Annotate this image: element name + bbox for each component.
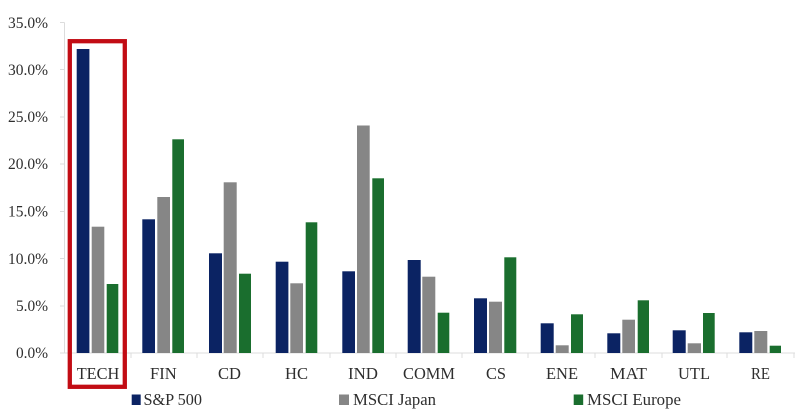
bars: MSCI Japan [92, 126, 767, 353]
y-axis labels: 15.0% [8, 204, 48, 220]
x-axis category labels: CS [486, 364, 506, 383]
x-axis category labels: RE [751, 364, 770, 383]
x-axis category labels: IND [348, 364, 378, 383]
legend [132, 390, 681, 409]
x-axis category labels: COMM [403, 364, 455, 383]
bars: S&P 500 [77, 49, 752, 353]
callout: red highlight box around TECH [70, 41, 125, 387]
x-axis category labels: ENE [546, 364, 578, 383]
x-axis category labels: HC [285, 364, 308, 383]
y-axis labels: 35.0% [8, 15, 48, 32]
x-axis category labels [77, 364, 770, 383]
y-axis labels: 0.0% [16, 345, 48, 362]
y-axis labels: 30.0% [8, 62, 48, 79]
y-axis labels: 5.0% [16, 298, 48, 315]
legend item: S&P 500: S&P 500 [144, 390, 202, 409]
bars: MSCI Europe [107, 139, 781, 353]
x-axis category labels: MAT [610, 364, 648, 383]
y-axis labels: 20.0% [8, 156, 48, 173]
x-axis category labels: TECH [77, 364, 119, 383]
x-axis category labels: FIN [150, 364, 177, 383]
y-axis labels [8, 15, 48, 362]
y-axis labels: 25.0% [8, 109, 48, 126]
x-axis category labels: CD [218, 364, 241, 383]
y-axis labels: 10.0% [8, 251, 48, 268]
legend item: MSCI Europe: MSCI Europe [587, 390, 681, 409]
legend item: MSCI Japan: MSCI Japan [353, 390, 436, 409]
x-axis category labels: UTL [678, 364, 710, 383]
